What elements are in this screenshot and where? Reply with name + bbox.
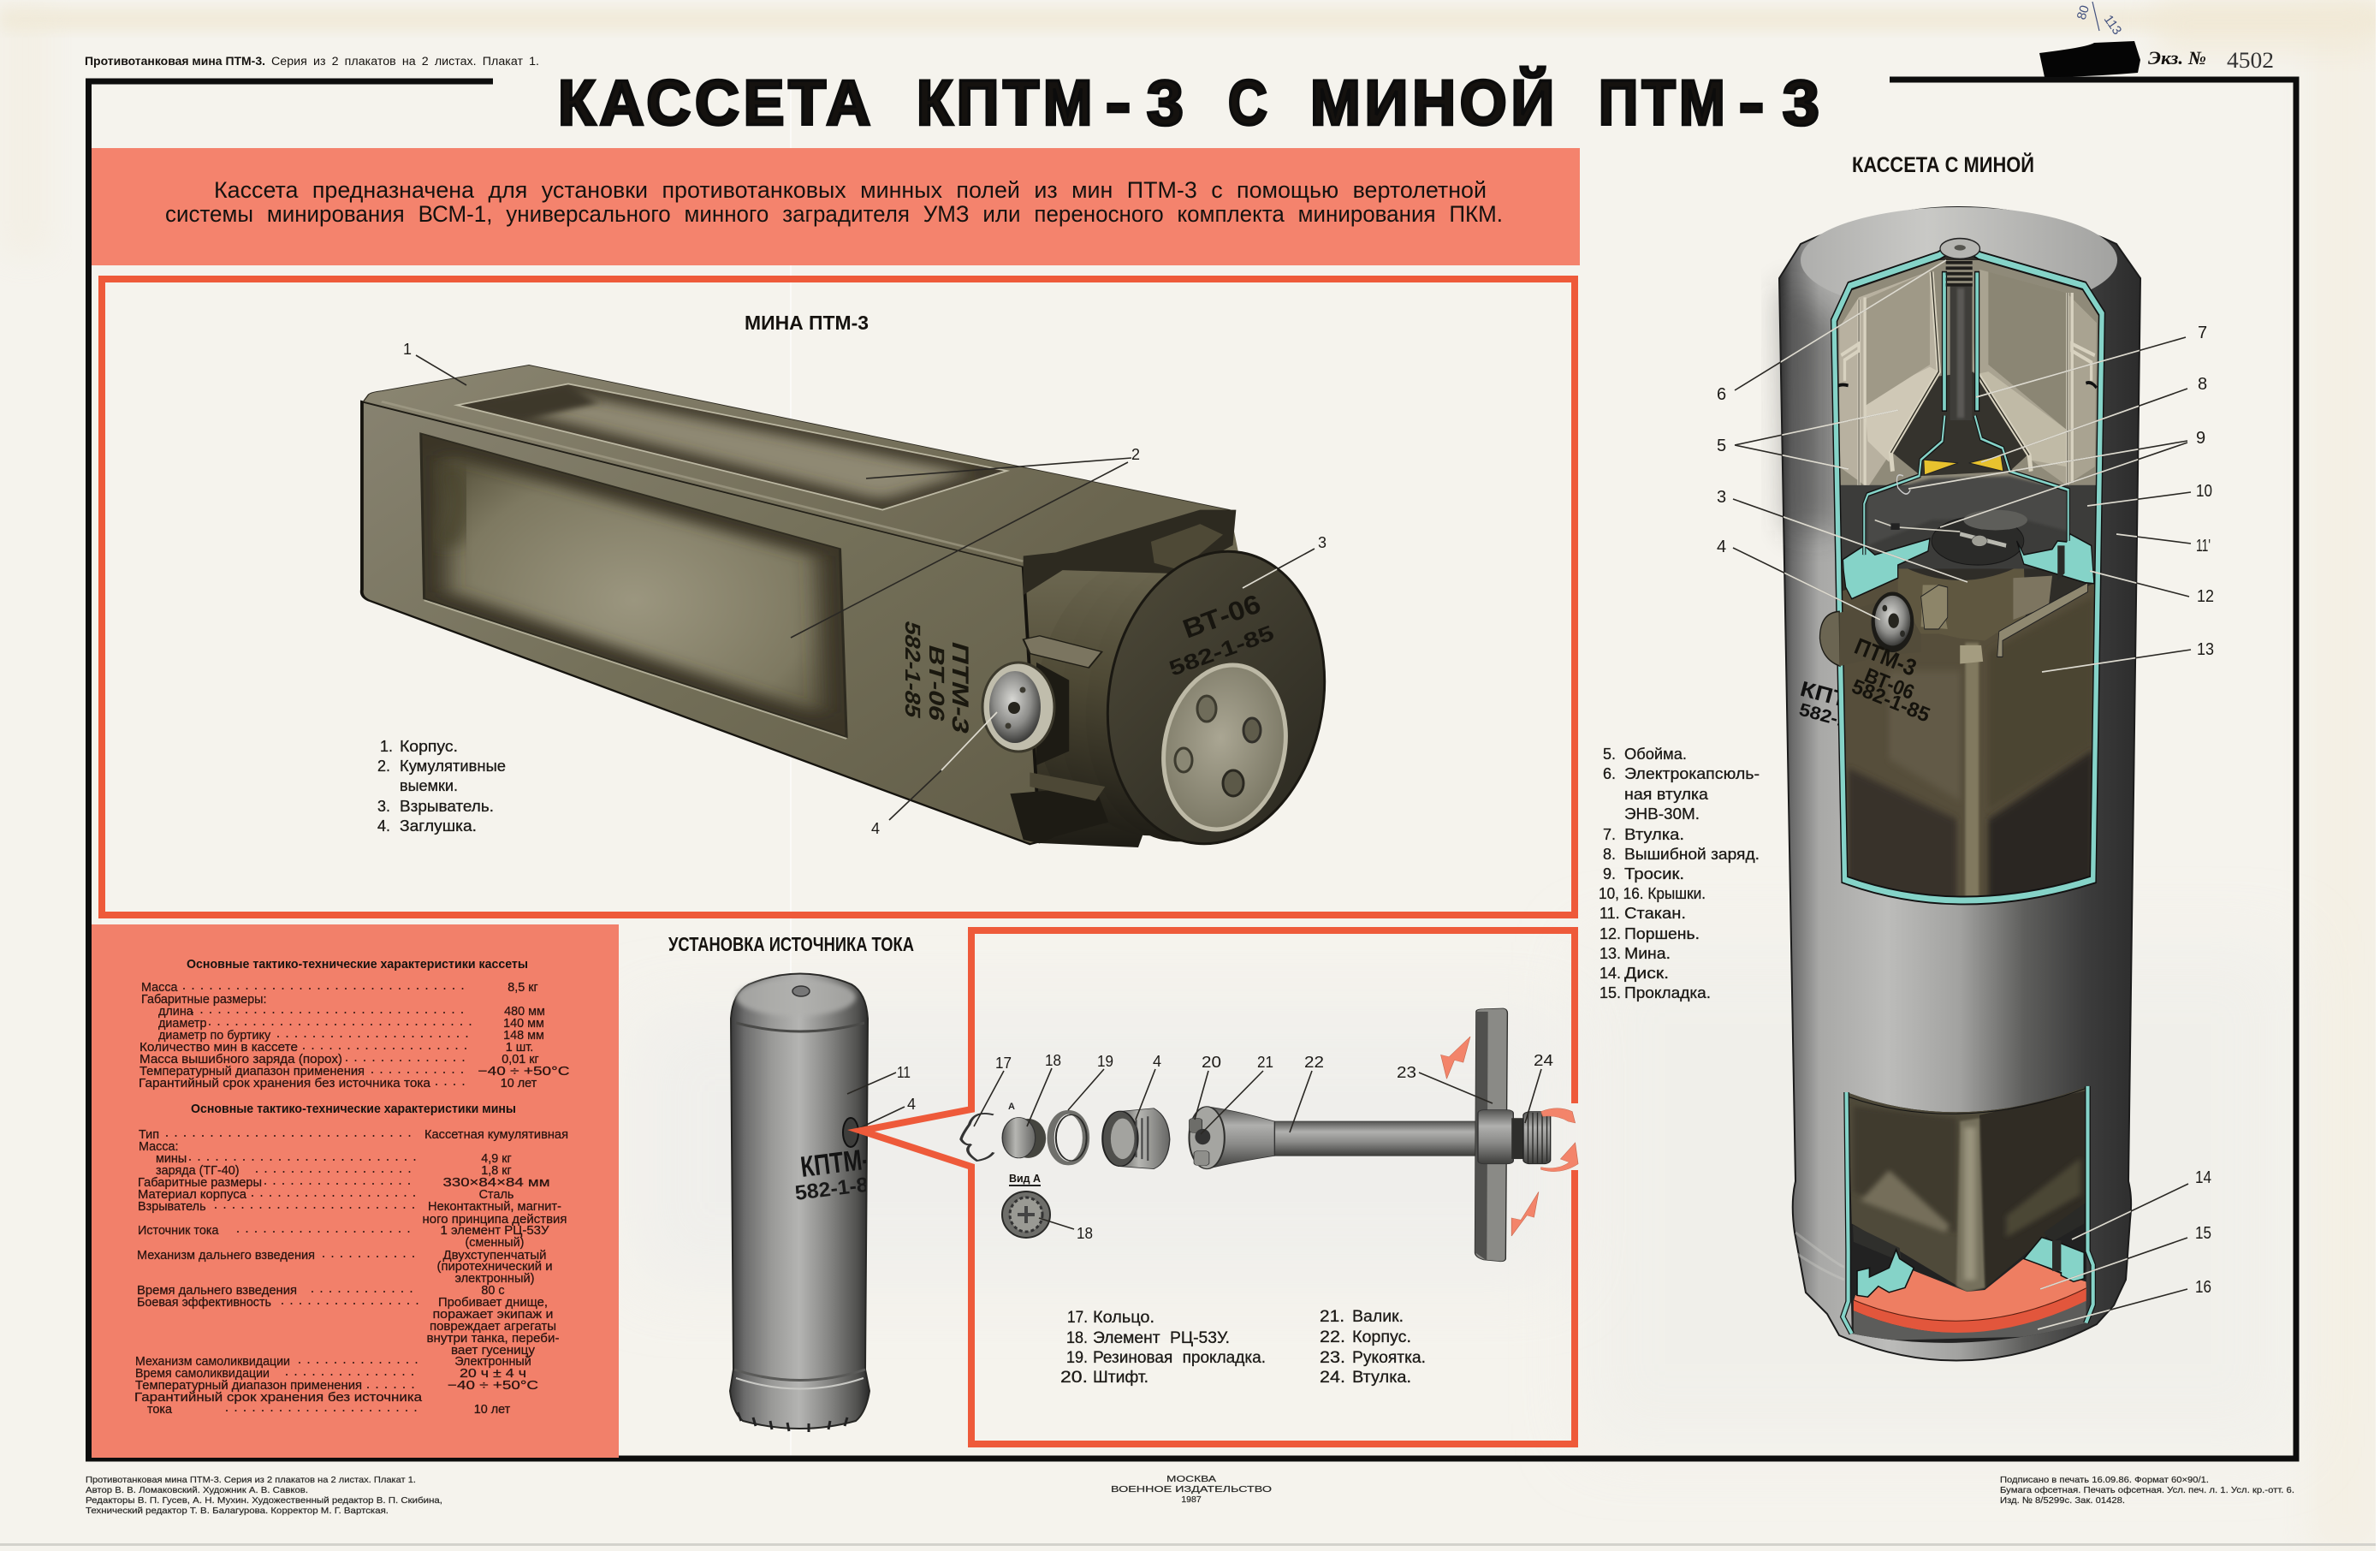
table: mine specifications: Сталь (479, 1188, 513, 1202)
legend: cassette parts: 7. (1603, 826, 1616, 843)
legend: battery parts: Кольцо. (1093, 1309, 1154, 1327)
legend: battery parts: 20. (1060, 1369, 1088, 1387)
legend: cassette parts: Стакан. (1624, 905, 1686, 922)
callouts: mine (403, 341, 1327, 837)
main title: КПТМ (917, 67, 1096, 139)
footer: publisher (1111, 1474, 1272, 1505)
legend: mine parts: 2. (377, 758, 390, 775)
table: mine specifications: 1 элемент РЦ-53У (440, 1224, 549, 1238)
legend: battery parts: Втулка. (1352, 1369, 1411, 1387)
footer: publisher: ВОЕННОЕ ИЗДАТЕЛЬСТВО (1111, 1484, 1272, 1495)
detail: view A of element 18: А (1008, 1102, 1015, 1112)
callouts: cassette parts: 7 (2198, 324, 2207, 342)
callouts: exploded parts (974, 1052, 1553, 1134)
legend: mine parts: 3. (377, 798, 390, 815)
table: mine specifications: 10 лет (474, 1403, 511, 1417)
table: mine specifications: Боевая эффективность (137, 1296, 271, 1310)
detail: view A of element 18: 18 (1077, 1225, 1093, 1242)
footer: credits: Автор В. В. Ломаковский. Художник А. В. Савков. (86, 1485, 308, 1495)
table: mine specifications: 330×84×84 мм (443, 1176, 549, 1190)
illustration: upper cutaway (1819, 239, 2105, 921)
legend: cassette parts: ная втулка (1624, 786, 1709, 803)
footer: print data (2000, 1475, 2294, 1506)
callouts: mine: 2 (1131, 446, 1140, 463)
main title: ПТМ (1599, 67, 1729, 139)
table: cassette specifications: длина (158, 1005, 193, 1019)
legend: battery parts: Валик. (1352, 1308, 1404, 1326)
table: cassette specifications: 10 лет (501, 1077, 537, 1090)
illustration: mine body: 582-1-85 (1166, 621, 1277, 681)
table: mine specifications: Габаритные размеры (138, 1176, 262, 1190)
legend: mine parts: Кумулятивные (400, 758, 506, 775)
illustration: cassette with battery port (730, 974, 916, 1432)
table: cassette specifications: Габаритные размеры: (141, 993, 267, 1007)
legend: cassette parts: Поршень. (1624, 925, 1700, 942)
table: mine specifications: электронный) (455, 1272, 534, 1286)
legend: cassette parts: 13. (1600, 945, 1621, 962)
running header (85, 55, 539, 68)
mine markings inside cutaway: 582-1-85 (1849, 675, 1933, 728)
table: mine specifications (134, 1128, 568, 1417)
table: mine specifications: Гарантийный срок хранения без источника (134, 1391, 422, 1405)
legend: battery parts: 22. (1320, 1328, 1345, 1346)
table: mine specifications: Неконтактный, магнит- (428, 1200, 561, 1214)
table: mine specifications: мины (156, 1152, 187, 1166)
table: mine specifications: заряда (ТГ-40) (156, 1164, 240, 1178)
table: mine specifications: (сменный) (466, 1236, 524, 1250)
serial number block: 80 (2074, 3, 2092, 21)
legend: cassette parts: 6. (1603, 765, 1616, 782)
heading: cassette with mine: КАССЕТА С МИНОЙ (1852, 152, 2034, 177)
legend: cassette parts: 12. (1600, 925, 1621, 942)
table: mine specifications: 20 ч ± 4 ч (460, 1367, 526, 1381)
main title: 3 (1147, 67, 1188, 139)
icon: rotation arrows (1441, 1037, 1578, 1236)
panel: cassette with mine (1717, 152, 2214, 1361)
table: mine specifications: Время дальнего взведения (137, 1284, 297, 1298)
legend: mine parts: Взрыватель. (400, 798, 494, 815)
purpose banner (92, 148, 1580, 265)
table: mine specifications: Источник тока (138, 1224, 218, 1238)
legend: cassette parts: Мина. (1624, 945, 1671, 962)
table: mine specifications: −40 ÷ +50°С (448, 1379, 538, 1393)
legend: battery parts: 24. (1320, 1369, 1345, 1387)
legend: cassette parts: 11. (1600, 905, 1620, 922)
table: mine specifications: ного принципа действия (423, 1213, 567, 1227)
table: cassette specifications (139, 981, 570, 1090)
running header: Серия из 2 плакатов на 2 листах. Плакат 1. (271, 55, 539, 68)
callouts: exploded parts: 20 (1202, 1054, 1221, 1071)
table: mine specifications: Пробивает днище, (438, 1296, 548, 1310)
table: mine specifications: Масса: (139, 1140, 179, 1154)
legend: cassette parts: Диск. (1624, 965, 1669, 982)
callouts: exploded parts: 22 (1304, 1054, 1324, 1071)
illustration: cassette body: 582-1-85 (1797, 700, 1878, 740)
legend: battery parts: 17. (1067, 1309, 1088, 1327)
table: mine specifications: тока (147, 1403, 172, 1417)
legend: cassette parts: 9. (1603, 865, 1616, 882)
main title: - (1739, 67, 1769, 139)
callouts: cassette parts: 9 (2196, 429, 2205, 448)
main title: - (1106, 67, 1136, 139)
table: cassette specifications: Масса (141, 981, 178, 995)
illustration: cassette with battery port: 582-1-85 (793, 1172, 881, 1205)
legend: battery parts: Резиновая прокладка. (1093, 1349, 1266, 1367)
callouts: cassette parts: 15 (2195, 1224, 2211, 1243)
legend: battery parts: Рукоятка. (1352, 1349, 1426, 1367)
legend: mine parts: Корпус. (400, 738, 458, 755)
callouts: mine: 3 (1318, 534, 1327, 551)
table: cassette specifications: диаметр (158, 1017, 206, 1031)
table: mine specifications: поражает экипаж и (433, 1308, 553, 1322)
table: cassette specifications: −40 ÷ +50°С (478, 1065, 570, 1079)
illustration: mine body: ВТ-06 (924, 642, 948, 724)
illustration: lower cutaway (1843, 1085, 2093, 1359)
legend: battery parts: 23. (1320, 1349, 1345, 1367)
legend: mine parts (377, 738, 506, 835)
table: mine specifications: Кассетная кумулятивная (424, 1128, 568, 1142)
table: cassette specifications: 0,01 кг (502, 1053, 539, 1067)
legend: cassette parts: Втулка. (1624, 826, 1684, 843)
mine markings inside cutaway: ВТ-06 (1861, 664, 1917, 704)
footer: publisher: 1987 (1181, 1495, 1202, 1505)
illustration: cassette with battery port: КПТМ-3 (798, 1142, 883, 1184)
detail: view A of element 18 (1002, 1102, 1093, 1242)
legend: cassette parts: 15. (1600, 984, 1621, 1001)
illustration: exploded tool parts (961, 1008, 1551, 1262)
callouts: exploded parts: 18 (1045, 1052, 1061, 1069)
callouts: cassette parts: 11' (2196, 537, 2211, 556)
purpose banner: Кассета предназначена для установки противотанковых минных полей из мин ПТМ-3 с помощью вертолетной (214, 177, 1487, 203)
table: cassette specifications: Масса вышибного заряда (порох) (139, 1053, 342, 1067)
main title (558, 67, 1824, 139)
legend: cassette parts: 8. (1603, 846, 1616, 863)
table: mine specifications: Время самоликвидации (135, 1367, 270, 1381)
heading: mine: МИНА ПТМ-3 (745, 312, 869, 334)
illustration: mine body (362, 365, 1347, 862)
legend: cassette parts: ЭНВ-30М. (1624, 805, 1700, 823)
legend: cassette parts: Вышибной заряд. (1624, 846, 1760, 863)
callouts: cassette parts: 14 (2195, 1168, 2211, 1187)
table: mine specifications: Материал корпуса (138, 1188, 246, 1202)
legend: mine parts: 4. (377, 817, 390, 835)
legend: battery parts: 21. (1320, 1308, 1344, 1326)
callouts: exploded parts: 23 (1397, 1064, 1416, 1081)
mine markings inside cutaway (1849, 633, 1933, 728)
table: cassette specifications: 480 мм (504, 1005, 545, 1019)
callouts: cassette parts: 12 (2197, 587, 2214, 606)
table: cassette specifications: 148 мм (503, 1029, 544, 1043)
legend: cassette parts: 14. (1600, 965, 1621, 982)
legend: mine parts: 1. (380, 738, 393, 755)
table: cassette specifications: диаметр по буртику (158, 1029, 271, 1043)
footer: credits: Редакторы В. П. Гусев, А. Н. Мухин. Художественный редактор В. П. Скибина, (86, 1495, 442, 1506)
table: mine specifications: Взрыватель (138, 1200, 206, 1214)
panel: battery installation detail (861, 930, 1578, 1444)
callouts: cassette parts: 3 (1717, 488, 1726, 507)
illustration: cassette with battery port: 4 (907, 1096, 916, 1113)
main title: МИНОЙ (1310, 67, 1558, 139)
table: cassette specifications: Температурный диапазон применения (139, 1065, 365, 1079)
table: cassette specifications: 8,5 кг (507, 981, 538, 995)
callouts: exploded parts: 4 (1153, 1053, 1161, 1070)
serial number block: 4502 (2227, 48, 2274, 73)
callouts: cassette parts: 16 (2195, 1278, 2211, 1297)
detail: view A of element 18: Вид А (1009, 1172, 1042, 1185)
table: mine specifications: Двухступенчатый (443, 1249, 546, 1263)
callouts: mine: 1 (403, 341, 412, 358)
table: mine specifications: Механизм самоликвидации (135, 1355, 290, 1369)
illustration: mine body: ВТ-06 (1178, 589, 1265, 645)
legend: cassette parts: Тросик. (1624, 865, 1684, 882)
panel: specifications (92, 924, 619, 1458)
legend: battery parts: Элемент РЦ-53У. (1093, 1329, 1230, 1347)
callouts: cassette parts: 6 (1717, 385, 1726, 404)
legend: mine parts: Заглушка. (400, 817, 477, 835)
main title: КАССЕТА (558, 67, 875, 139)
table: mine specifications: 4,9 кг (481, 1152, 512, 1166)
serial number block: 113 (2101, 13, 2124, 38)
table: mine specifications: повреждает агрегаты (430, 1320, 556, 1334)
table: mine specifications: (пиротехнический и (436, 1260, 553, 1274)
running header: Противотанковая мина ПТМ-3. (85, 55, 265, 68)
table: mine specifications: Тип (139, 1128, 159, 1142)
footer: credits: Противотанковая мина ПТМ-3. Серия из 2 плакатов на 2 листах. Плакат 1. (86, 1475, 416, 1485)
footer: print data: Бумага офсетная. Печать офсетная. Усл. печ. л. 1. Усл. кр.-отт. 6. (2000, 1485, 2294, 1495)
table: mine specifications: 80 с (481, 1284, 505, 1298)
footer: print data: Подписано в печать 16.09.86. Формат 60×90/1. (2000, 1475, 2209, 1485)
callouts: cassette parts (1717, 260, 2214, 1329)
legend: cassette parts: Обойма. (1624, 746, 1687, 763)
table: mine specifications: Температурный диапазон применения (135, 1379, 362, 1393)
legend: cassette parts: Прокладка. (1624, 984, 1711, 1001)
legend: battery parts: Корпус. (1352, 1328, 1411, 1346)
table: mine specifications: вает гусеницу (451, 1344, 536, 1358)
footer: credits (86, 1475, 442, 1516)
panel: mine PTM-3 (102, 279, 1575, 915)
mine markings inside cutaway: ПТМ-3 (1851, 633, 1920, 681)
purpose banner: системы минирования ВСМ-1, универсального минного заградителя УМЗ или переносного комплекта минирования ПКМ. (165, 201, 1503, 227)
callouts: cassette parts: 13 (2197, 640, 2214, 659)
legend: battery parts (1060, 1308, 1426, 1387)
callouts: cassette parts: 4 (1717, 538, 1726, 556)
illustration: mine body: 582-1-85 (900, 618, 924, 721)
callouts: exploded parts: 19 (1097, 1053, 1113, 1070)
heading: mine specifications: Основные тактико-технические характеристики мины (191, 1102, 516, 1116)
callouts: cassette parts: 5 (1717, 437, 1726, 455)
table: mine specifications: 1,8 кг (481, 1164, 512, 1178)
legend: mine parts: выемки. (400, 777, 458, 794)
legend: cassette parts: 10, 16. Крышки. (1599, 885, 1706, 902)
illustration: mine body: ПТМ-3 (947, 639, 973, 737)
callouts: exploded parts: 17 (995, 1055, 1012, 1072)
table: mine specifications: внутри танка, переби- (426, 1332, 560, 1346)
table: mine specifications: Электронный (454, 1355, 531, 1369)
legend: cassette parts: 5. (1603, 746, 1616, 763)
callouts: exploded parts: 24 (1534, 1052, 1553, 1069)
footer: print data: Изд. № 8/5299с. Зак. 01428. (2000, 1495, 2125, 1506)
legend: battery parts: Штифт. (1093, 1369, 1148, 1387)
legend: cassette parts: Электрокапсюль- (1624, 765, 1760, 782)
table: mine specifications: Механизм дальнего взведения (137, 1249, 315, 1263)
main title: С (1228, 67, 1271, 139)
table: cassette specifications: 1 шт. (506, 1041, 533, 1055)
main title: 3 (1783, 67, 1824, 139)
callouts: mine: 4 (871, 820, 880, 837)
heading: battery installation: УСТАНОВКА ИСТОЧНИКА ТОКА (668, 933, 914, 955)
illustration: cassette body: КПТМ (1797, 677, 1870, 718)
illustration: cassette body (1779, 207, 2140, 1361)
serial number block: Экз. № (2148, 47, 2206, 68)
illustration: cassette with battery port: 11 (897, 1064, 911, 1081)
callouts: cassette parts: 10 (2196, 482, 2212, 501)
footer: publisher: МОСКВА (1166, 1474, 1216, 1484)
serial number block (2039, 2, 2274, 77)
callouts: cassette parts: 8 (2198, 375, 2207, 394)
footer: credits: Технический редактор Т. В. Балагурова. Корректор М. Г. Вартская. (86, 1506, 389, 1516)
legend: battery parts: 19. (1066, 1349, 1088, 1367)
callouts: exploded parts: 21 (1257, 1054, 1273, 1071)
table: cassette specifications: Количество мин в кассете (139, 1041, 298, 1055)
heading: cassette specifications: Основные тактико-технические характеристики кассеты (187, 957, 528, 972)
table: cassette specifications: 140 мм (503, 1017, 544, 1031)
legend: battery parts: 18. (1066, 1329, 1088, 1347)
table: cassette specifications: Гарантийный срок хранения без источника тока (139, 1077, 430, 1090)
legend: cassette parts (1599, 746, 1760, 1001)
